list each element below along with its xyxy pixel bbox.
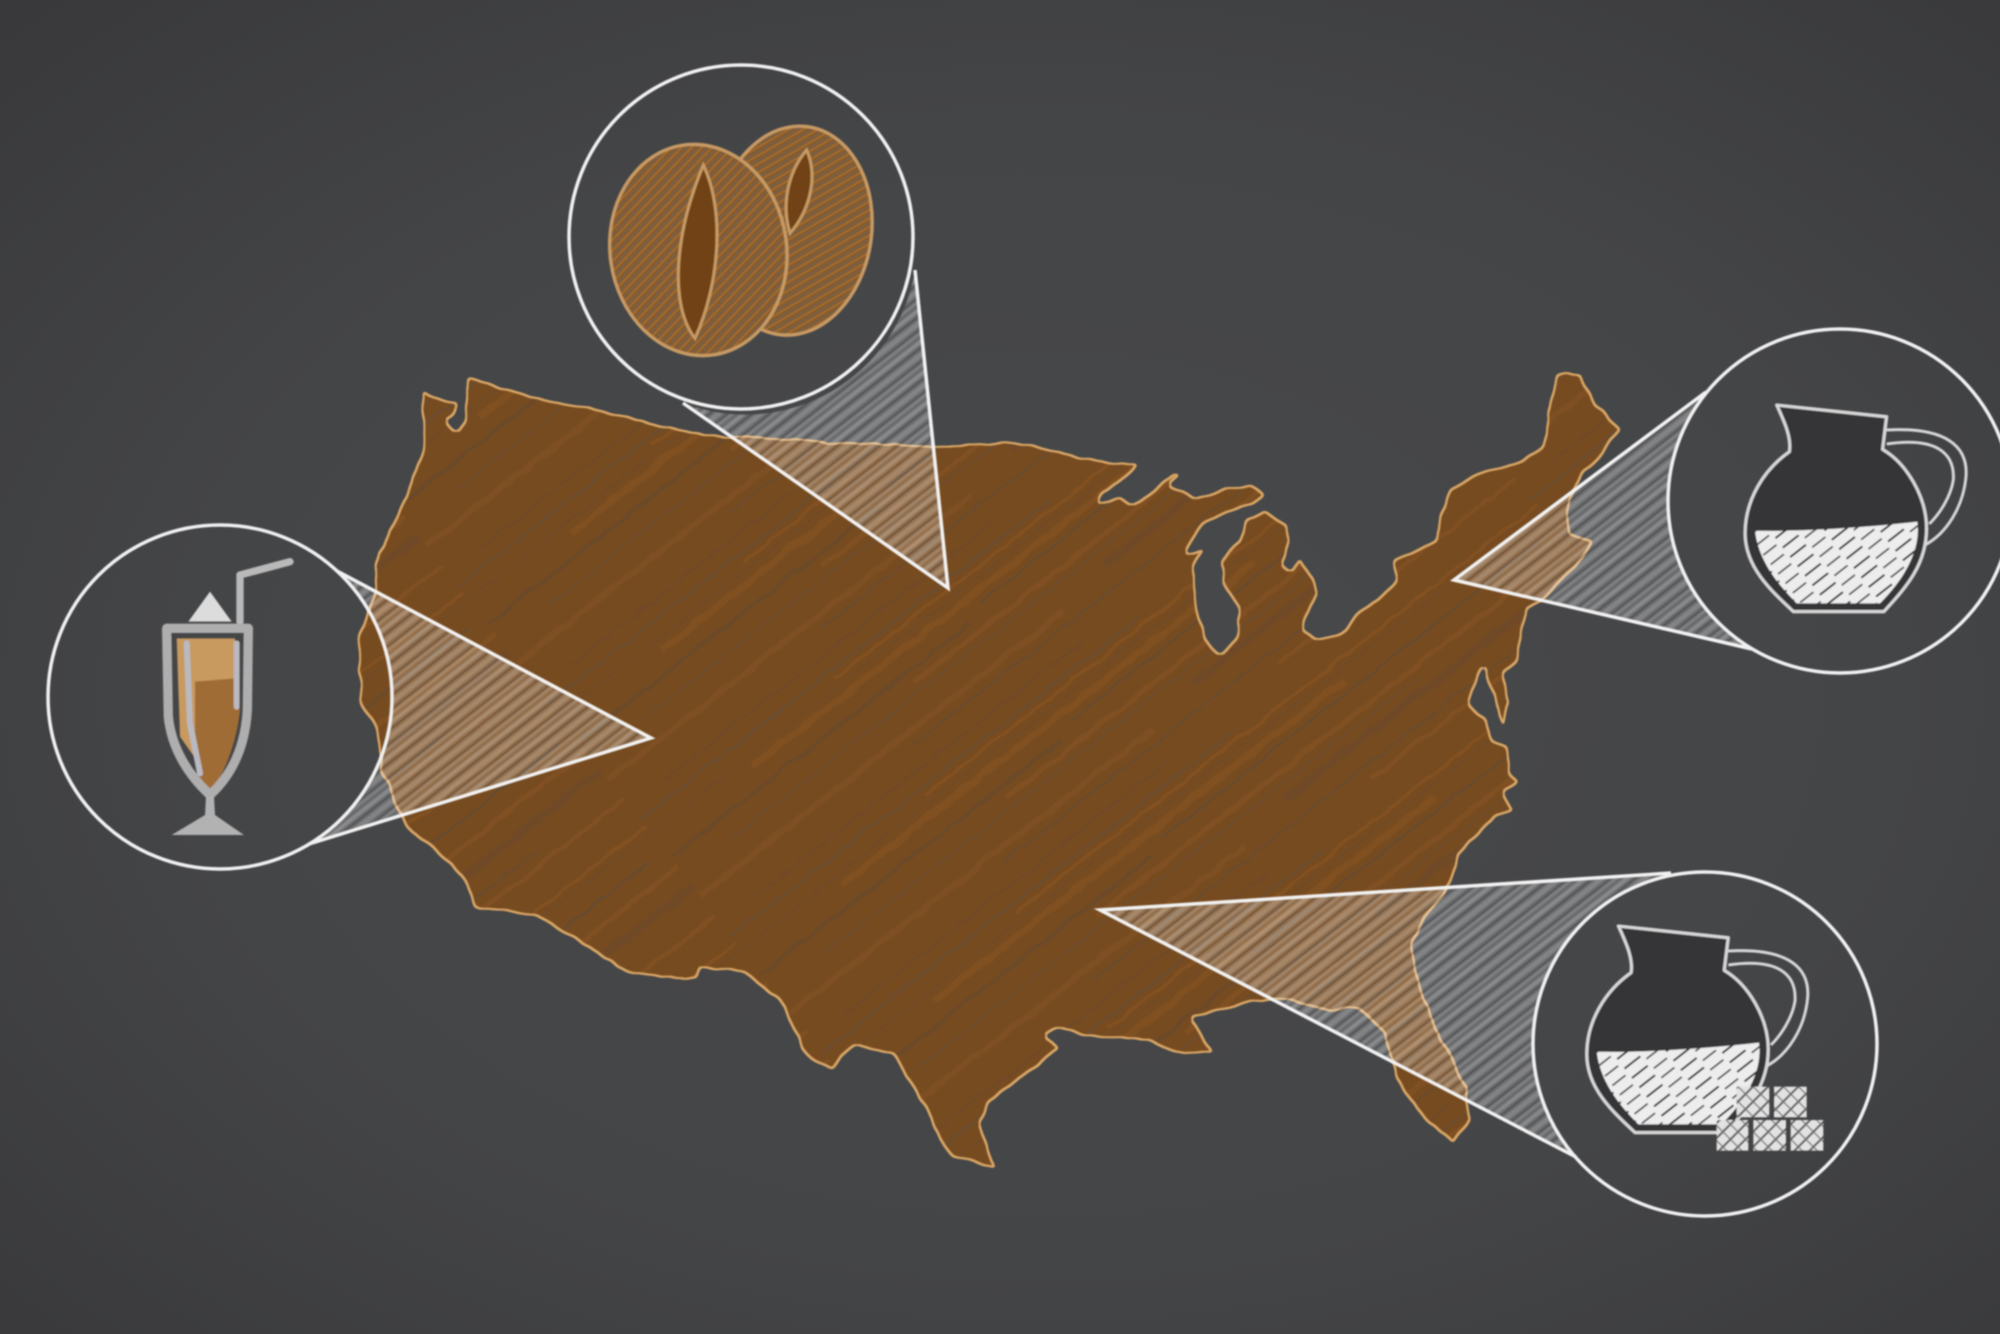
circle: coffee beans <box>569 65 913 409</box>
pitcher <box>1587 926 1808 1133</box>
inner straw <box>187 643 200 773</box>
glass outline <box>167 628 248 795</box>
back bean <box>701 116 886 346</box>
icon: pitcher with milk <box>1745 405 1966 612</box>
icon: coffee beans <box>596 116 886 367</box>
circle: milkshake <box>48 525 392 869</box>
callout wedge: milkshake <box>309 571 651 844</box>
whipped cream <box>188 592 232 622</box>
map of the United States <box>358 374 1621 1168</box>
callout: coffee beans <box>569 65 948 588</box>
sugar cubes <box>1717 1087 1823 1151</box>
pointer lines: milkshake <box>309 571 651 844</box>
callout wedge: pitcher with sugar <box>1100 875 1671 1157</box>
circle: pitcher half full <box>1668 329 2000 673</box>
icon: pitcher with sugar cubes <box>1587 926 1823 1151</box>
pointer lines: pitcher half full <box>1454 392 1752 649</box>
milk level <box>1755 522 1918 603</box>
shake dark layer <box>195 678 240 792</box>
glass foot <box>172 797 244 835</box>
front bean <box>596 133 801 367</box>
pointer lines: coffee beans <box>683 270 948 588</box>
circle: pitcher with sugar <box>1533 872 1877 1216</box>
icon: milkshake <box>167 562 290 835</box>
pitcher handle <box>1887 430 1966 545</box>
callout: pitcher half full <box>1454 329 2000 673</box>
callout wedge: pitcher half full <box>1454 392 1752 649</box>
pointer lines: pitcher with sugar <box>1100 873 1671 1157</box>
straw <box>240 562 290 622</box>
shake light layer <box>177 638 235 757</box>
callout wedge: coffee beans <box>683 270 948 588</box>
pitcher body <box>1745 405 1927 612</box>
callout: milkshake <box>48 525 651 869</box>
callout: pitcher with sugar <box>1100 872 1877 1216</box>
